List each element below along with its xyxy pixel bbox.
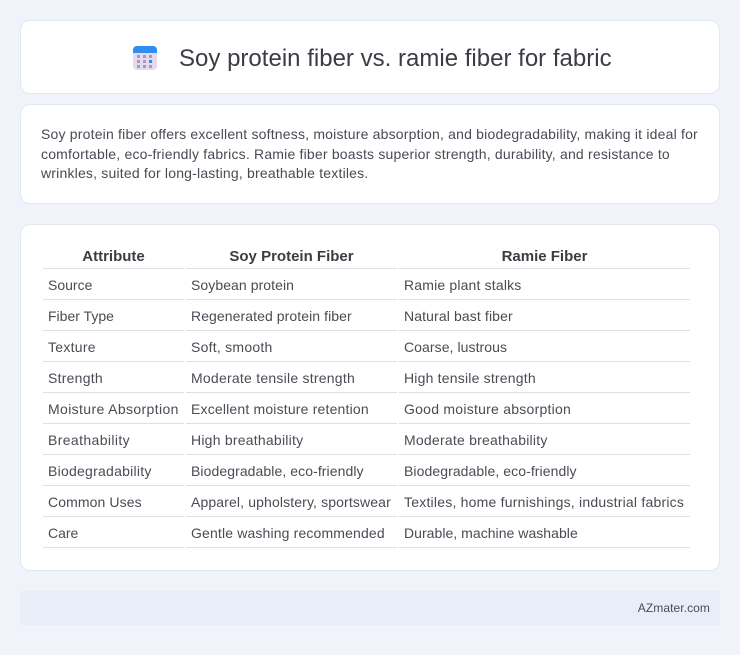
row: breathability: Breathability [48, 432, 130, 448]
row: common uses: Common Uses [48, 494, 142, 510]
table header [82, 248, 588, 265]
row: common uses: Apparel, upholstery, sportswear [191, 494, 391, 510]
row: care [48, 525, 578, 541]
table header: Ramie Fiber [502, 248, 587, 265]
row: breathability: Moderate breathability [404, 432, 548, 448]
row: strength: Strength [48, 370, 103, 386]
row: care: Care [48, 525, 78, 541]
summary text: wrinkles, suited for long-lasting, breathable textiles. [41, 165, 368, 181]
row: fiber type: Regenerated protein fiber [191, 308, 352, 324]
row: texture: Texture [48, 339, 96, 355]
panel: comparison table [20, 224, 720, 571]
row: common uses: Textiles, home furnishings, industrial fabrics [404, 494, 684, 510]
table header: Attribute [82, 248, 145, 265]
row: fiber type: Natural bast fiber [404, 308, 513, 324]
row: texture: Coarse, lustrous [404, 339, 507, 355]
summary text [41, 126, 698, 181]
row: source: Source [48, 277, 92, 293]
footer bar [20, 591, 720, 625]
row: common uses [48, 494, 684, 510]
row: moisture absorption: Good moisture absorption [404, 401, 571, 417]
row: fiber type [48, 308, 513, 324]
row: source: Soybean protein [191, 277, 294, 293]
row: texture [48, 339, 507, 355]
row: texture: Soft, smooth [191, 339, 273, 355]
summary text: comfortable, eco-friendly fabrics. Ramie fiber boasts superior strength, durability, and resistance to [41, 146, 670, 162]
row: biodegradability [48, 463, 577, 479]
row: moisture absorption: Moisture Absorption [48, 401, 179, 417]
panel: header [20, 20, 720, 94]
title: Soy protein fiber vs. ramie fiber for fabric [179, 45, 612, 72]
row: biodegradability: Biodegradable, eco-friendly [191, 463, 364, 479]
row: strength: High tensile strength [404, 370, 536, 386]
row: strength: Moderate tensile strength [191, 370, 355, 386]
row: care: Durable, machine washable [404, 525, 578, 541]
row: care: Gentle washing recommended [191, 525, 385, 541]
row: strength [48, 370, 536, 386]
row: source [48, 277, 521, 293]
row: breathability: High breathability [191, 432, 303, 448]
row: biodegradability: Biodegradability [48, 463, 152, 479]
table header: Soy Protein Fiber [229, 248, 354, 265]
row: moisture absorption [48, 401, 571, 417]
row: fiber type: Fiber Type [48, 308, 114, 324]
panel: summary [20, 104, 720, 204]
row: source: Ramie plant stalks [404, 277, 521, 293]
summary text: Soy protein fiber offers excellent softness, moisture absorption, and biodegradability, making it ideal for [41, 126, 698, 142]
row: moisture absorption: Excellent moisture retention [191, 401, 369, 417]
icon: calendar [133, 46, 157, 70]
footer credit: AZmater.com [638, 601, 710, 615]
row: biodegradability: Biodegradable, eco-friendly [404, 463, 577, 479]
row: breathability [48, 432, 548, 448]
